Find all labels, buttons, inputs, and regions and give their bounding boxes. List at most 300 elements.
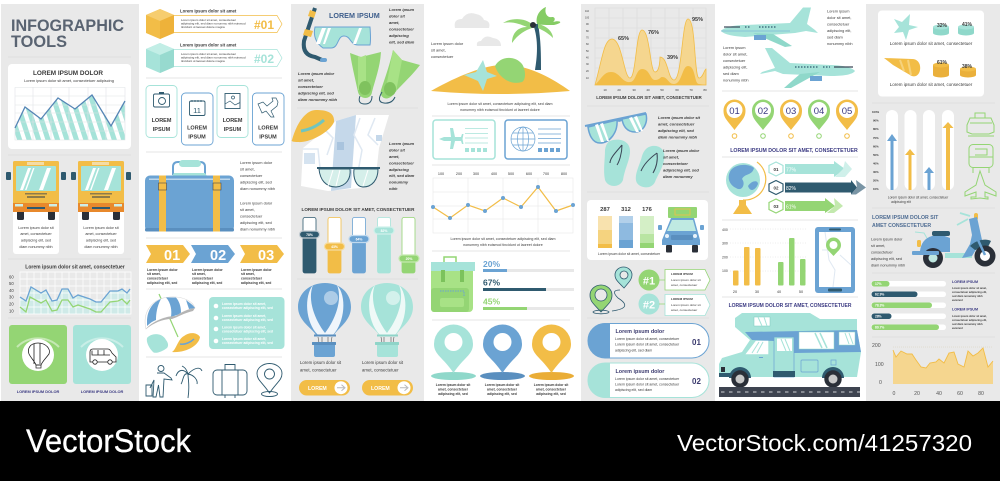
area chart with percent peaks: 95% [692,17,703,23]
arrow steps: sit amet, [192,272,206,276]
text block: map right: Lorem ipsum [389,141,415,146]
arrow steps: Lorem ipsum dolor [241,268,272,272]
text block: scooter: sit amet, [871,244,885,248]
panel: bus two: diam nonummy nibh [84,245,118,249]
text block: plane one: adipiscing elit, [827,28,851,33]
line chart with markers: 700 [543,172,549,176]
suitcase text [240,160,275,232]
pill 02: Lorem ipsum dolor sit amet, consectetuer [615,377,680,381]
text block: flip flops [663,148,700,179]
arrow bar chart: 30% [873,170,879,174]
arrow steps: consectetuer [147,276,169,280]
pill 01: Lorem ipsum dolor sit amet, consectetuer [615,342,680,346]
callouts #1 #2: Lorem ipsum dolor sit [671,278,701,282]
text block: progress legend: LOREM IPSUM [952,308,978,312]
text block: plane two: dolor sit amet, [723,52,747,56]
icon: route pins [590,267,632,314]
area chart with percent peaks: LOREM IPSUM DOLOR SIT AMET, CONSECTETUER [596,95,703,100]
text block: fins left: diam nonummy nibh [298,97,338,102]
area chart: 0 [893,391,896,397]
arrow 01: 77% [786,168,797,174]
arrow 03 [769,198,843,213]
panel: bus one: diam nonummy nibh [19,245,53,249]
arrow bar chart: 40% [873,162,879,166]
balloon captions: amet, consectetuer [362,368,399,372]
icon: flip flops [604,140,664,187]
text block: map right: adipiscing [389,167,409,172]
step tag 02: tincidunt ut laoreet dolore magna [181,59,225,63]
callouts #1 #2: amet, consectetuer [671,283,697,287]
panel: bus two [71,161,131,254]
icon: plane one [721,8,818,47]
arrow bar chart: 70% [873,136,879,140]
panel: balloon icon: LOREM IPSUM DOLOR [17,389,59,394]
suitcase text: diam nonummy nibh [240,226,275,232]
arrow bar chart: 80% [873,127,879,131]
vertical slider chart [300,207,419,273]
area chart: 20 [914,391,920,397]
text block: plane one: sed diam [827,34,843,40]
text block: plane two: adipiscing elit, [723,64,747,70]
line chart with markers: 200 [456,172,462,176]
card: plane: IPSUM [259,134,277,140]
panel: line chart: Lorem ipsum dolor sit amet, consectetuer adipiscing [24,78,114,83]
pill 02: adipiscing elit, sed diam [615,388,652,392]
pins 01 to 05 [724,100,858,138]
icon: teal pin: amet, consectetuer [438,388,469,392]
text block: plane two: sed diam [723,71,739,76]
arrow bar chart: adipiscing elit [891,200,911,204]
panel: bus one: Lorem ipsum dolor sit [18,226,54,230]
balloon captions: amet, consectetuer [300,368,337,372]
bar chart: 40 [777,290,781,294]
button one: LOREM [308,386,327,392]
card: calendar [182,93,213,145]
text block: progress legend: sed diam nonummy nibh [952,322,983,326]
text block: map right: amet, [389,154,399,159]
panel: star, shell, cylinders: 32% [937,23,948,29]
balloon captions: Lorem ipsum dolor sit [362,360,404,365]
text block: progress legend: euismod [952,326,963,330]
callouts #1 #2: LOREM IPSUM [671,272,693,276]
arrow steps [146,245,284,285]
icon: yellow pin: Lorem ipsum dolor sit [534,383,569,387]
text block: progress legend: sed diam nonummy nibh [952,294,983,298]
icon: blue pin: amet, consectetuer [487,388,518,392]
step tag 02: Lorem ipsum dolor sit amet [180,42,237,48]
panel: bus two: amet, consectetuer [85,232,117,236]
multi-line area chart: 60 [9,274,14,280]
line chart with markers: 400 [491,172,497,176]
bar chart: 50 [799,290,803,294]
card: camera [146,86,177,138]
arrow bar chart: 100% [872,110,880,114]
text block: sunglasses: diam nonummy nibh [658,134,698,140]
text block: plane one: Lorem ipsum [827,8,850,14]
horizontal progress pills: 62.9% [875,292,884,296]
text block: plane two: Lorem ipsum [723,45,746,50]
text block: snorkel right: adipiscing [389,33,409,38]
vertical slider chart: LOREM IPSUM DOLOR SIT AMET, CONSECTETUER [302,207,415,212]
text block: sunglasses: Lorem ipsum dolor sit [658,115,701,120]
title [11,17,124,51]
progress bars: 20% [483,259,500,269]
balloon captions: Lorem ipsum dolor sit [300,360,342,365]
heading: scooter: LOREM IPSUM DOLOR SIT [872,215,939,221]
horizontal progress pills: 28% [875,314,882,318]
icon: teal pin: Lorem ipsum dolor sit [436,383,471,387]
arrow bar chart: 60% [873,144,879,148]
text block: snorkel right: Lorem ipsum [389,7,415,12]
panel: star, shell, cylinders: 61% [937,60,948,66]
panel: balloon icon [9,325,67,394]
illustration: camper van [719,313,861,397]
icon: suitcase [145,160,234,232]
area chart [872,343,993,397]
arrow steps: adipiscing elit, sed [147,281,177,285]
text block: scooter: adipiscing elit, sed [871,257,902,261]
suitcase text: adipiscing elit, sed [240,220,272,225]
area chart with percent peaks: 90 [586,23,589,26]
step tag 01: Lorem ipsum dolor sit amet, consectetuer [181,18,236,22]
area chart with percent peaks: 76% [648,30,659,36]
arrow steps: sit amet, [147,272,161,276]
multi-line area chart: 10 [9,308,14,314]
icon: teal pin [431,324,476,396]
area chart: 60 [957,391,963,397]
text block: scooter [871,238,905,268]
arrow 02 [769,180,866,194]
arrow steps: adipiscing elit, sed [192,281,222,285]
green line icons: ship, bus, plane [965,113,996,199]
text block: island [431,41,464,59]
pill 02: Lorem ipsum dolor sit amet, consectetuer [615,382,680,386]
callouts #1 #2 [638,270,710,316]
bar chart: 400 [722,228,728,232]
button one [299,380,350,396]
pill 02: Lorem ipsum dolor [616,369,665,375]
pill 01 [588,323,709,358]
text block: island caption [447,102,553,112]
icon: sunglasses [585,113,647,143]
card: calendar: 11 [193,106,201,115]
area chart with percent peaks: 20 [586,70,589,73]
line chart with markers: 300 [473,172,479,176]
pins 01 to 05: 02 [758,106,768,117]
arrow bar chart: 20% [873,178,879,182]
arrow steps: sit amet, [241,272,255,276]
text block: scooter: Lorem ipsum dolor [871,238,903,242]
card: plane: LOREM [258,126,278,132]
area chart with percent peaks: 80 [586,30,589,33]
watermark bar: VectorStock.com/41257320 [677,430,972,456]
suitcase text: sit amet, [240,207,255,212]
icon: teal pin: adipiscing elit, sed [438,392,468,396]
area chart with percent peaks: 65% [618,36,629,42]
arrow bar chart [872,110,954,204]
text block: map right: elit, sed diam [389,173,415,178]
panel: stacked bars and car: Lorem ipsum dolor sit amet, consectetuer [598,252,661,256]
text block: map right: dolor sit [389,148,405,152]
button two: LOREM [371,386,390,392]
area chart with percent peaks: 50 [586,50,589,53]
area chart with percent peaks: 40 [586,56,589,60]
line icons: traveller, palm, suitcase, pin [146,364,282,398]
text block: plane one: dolor sit amet, [827,15,851,20]
area chart with percent peaks: 50 [660,88,664,92]
card: world ticket [505,120,567,159]
area chart with percent peaks: 70 [689,88,693,92]
area chart with percent peaks: 70 [586,36,589,40]
text block: fins left: Lorem ipsum dolor [298,71,335,76]
line chart with markers: 500 [508,172,514,176]
illustration: island with palm [431,7,570,94]
suitcase text: diam nonummy nibh [240,186,275,191]
card: camera: IPSUM [153,127,171,133]
area chart with percent peaks: 20 [617,88,621,92]
button two [362,380,413,396]
text block: map right [389,141,415,191]
panel: star, shell, cylinders [878,10,984,96]
area chart: 80 [978,391,984,397]
line chart with markers: 100 [438,172,444,176]
icon: yellow pin: amet, consectetuer [536,388,567,392]
card: flight ticket [433,120,495,159]
card: picture [217,86,248,138]
arrow 01 [769,161,852,177]
area chart: 200 [872,343,881,349]
bar chart: 100 [722,269,728,273]
text block: fins left [298,71,338,102]
pins 01 to 05: 03 [786,106,796,117]
area chart with percent peaks: 30 [632,88,636,92]
icon: phone with map pin [815,227,855,293]
suitcase text: Lorem ipsum dolor [240,200,273,206]
suitcase text: consectetuer [240,173,263,178]
icon: scooter [912,213,996,268]
callouts #1 #2: #1 [643,276,655,288]
text block: flip flops: consectetuer [663,161,688,166]
icon: fins [350,50,420,104]
area chart with percent peaks: 100 [585,16,590,20]
callouts #1 #2: Lorem ipsum dolor sit [671,303,701,307]
line chart with markers: nonummy nibh euismod tincidunt ut laoreet dolore [463,243,543,247]
vertical slider chart: 64% [356,238,362,242]
area chart: 40 [936,391,942,397]
text block: progress legend: LOREM IPSUM [952,280,978,284]
text block: plane two: consectetuer [723,58,746,63]
panel: star, shell, cylinders: 41% [962,22,973,28]
arrow 02: 02 [773,186,779,190]
pill 01: Lorem ipsum dolor [616,329,665,335]
area chart: 0 [879,380,882,386]
icon: map, hat, glasses [292,110,389,191]
panel: bus one: amet, consectetuer [20,232,52,236]
text block: plane one: nonummy nibh [827,41,853,46]
step tag 01 [146,8,282,39]
icon: plane two [760,48,855,88]
watermark bar [0,401,1000,481]
arrow 03: 61% [786,204,797,210]
area chart: 100 [875,362,884,368]
suitcase text: Lorem ipsum dolor [240,160,273,165]
clouds [455,13,501,46]
panel: star, shell, cylinders: Lorem ipsum dolor sit amet, consectetuer [890,41,973,46]
panel: bullet list: consectetuer adipiscing elit, sed [222,330,273,334]
card: camera: LOREM [152,118,172,124]
pins 01 to 05: 04 [814,106,824,117]
suitcase text: consectetuer [240,214,263,218]
text block: island: consectetuer [431,54,454,59]
arrow bar chart: 10% [873,187,879,191]
step tag 02: Lorem ipsum dolor sit amet, consectetuer [181,52,236,56]
icon: snorkel and mask [303,8,370,62]
text block: scooter: diam nonummy nibh [871,264,905,268]
text block: sunglasses [658,115,701,140]
text block: map right: consectetuer [389,160,414,166]
icon: blue pin: Lorem ipsum dolor sit [485,383,520,387]
area chart with percent peaks [585,8,707,100]
icon: yellow pin: adipiscing elit, sed [536,392,566,396]
multi-line area chart: Lorem ipsum dolor sit amet, consectetuer [25,264,125,270]
horizontal progress pills [871,281,946,330]
arrow 03: 03 [773,204,779,209]
callouts #1 #2: #2 [643,300,655,312]
card: calendar: LOREM [187,126,207,132]
progress bars: 45% [483,296,500,306]
vertical slider chart: 20% [406,257,412,261]
horizontal progress pills: 89.7% [875,326,884,330]
icon: beach umbrella, shell, hat [145,294,200,353]
horizontal progress pills: 78.3% [875,304,884,308]
icon: yellow pin [529,324,574,396]
text block: island: sit amet, [431,48,446,52]
multi-line area chart [9,264,131,314]
panel: bus one [6,161,66,254]
icon: backpack [431,257,475,312]
card: picture: LOREM [223,118,243,124]
step tag 02: #02 [254,52,274,66]
panel: bus two: adipiscing elit, sed [86,238,116,242]
bar chart: 300 [722,242,728,246]
panel: bullet list: consectetuer adipiscing elit, sed [222,341,273,345]
step tag 02: adipiscing elit, sed diam nonummy nibh euismod [181,56,246,60]
title: INFOGRAPHIC [11,17,124,35]
area chart with percent peaks: 30 [586,63,589,66]
arrow steps: Lorem ipsum dolor [192,268,223,272]
step tag 01: adipiscing elit, sed diam nonummy nibh euismod [181,22,246,26]
pill 01: adipiscing elit, sed diam [615,348,652,352]
card: calendar: IPSUM [188,134,206,140]
area chart with percent peaks: 39% [667,55,678,61]
text block: fins left: adipiscing elit, sed [298,90,334,96]
text block: snorkel right: consectetuer [389,26,414,32]
arrow steps: 02 [210,248,226,264]
text block: sunglasses: adipiscing elit, sed [658,128,694,133]
progress bars [483,259,574,310]
icon: blue pin [480,324,525,396]
area chart with percent peaks: 110 [585,10,590,13]
callouts #1 #2: LOREM IPSUM [671,297,693,301]
arrow bar chart: Lorem ipsum dolor sit amet, consectetuer [888,196,949,200]
panel: bullet list: consectetuer adipiscing elit, sed [222,318,273,322]
text block: map right: nonummy [389,180,409,184]
icon: blue pin: adipiscing elit, sed [487,392,517,396]
text block: plane one [827,8,853,46]
horizontal progress pills: 17% [875,282,882,286]
panel: stacked bars and car: 176 [642,207,653,213]
text block: island caption: Lorem ipsum dolor sit amet, consectetuer adipiscing elit, sed diam [447,102,553,106]
line chart with markers: 800 [561,172,567,176]
arrow bar chart: 90% [873,118,879,122]
text block: sunglasses: amet, consectetuer [658,122,695,126]
area chart with percent peaks: 40 [646,88,650,92]
panel: stacked bars and car [587,200,708,260]
arrow steps: consectetuer [241,276,263,280]
bar chart: 200 [722,256,728,260]
pill 02 [588,363,709,398]
arrow 02: 82% [786,186,797,192]
text block: progress legend: consectetuer adipiscing elit, [952,290,987,294]
panel: bullet list [209,297,284,349]
text block: scooter: consectetuer [871,250,893,254]
text block: map right: nibh [389,186,398,191]
vertical slider chart: 43% [331,245,338,249]
panel: bullet list: Lorem ipsum dolor sit amet, [222,326,266,330]
text block: flip flops: Lorem ipsum dolor [663,148,700,153]
panel: stacked bars and car: 312 [621,207,631,213]
text block: island caption: nonummy nibh euismod tincidunt ut laoreet dolore [460,108,540,112]
icon: blue balloon [298,283,351,357]
bar chart [722,228,807,294]
arrow steps: adipiscing elit, sed [241,281,271,285]
bar chart: 20 [733,290,737,294]
text block: flip flops: adipiscing elit, sed [663,168,699,172]
text block: progress legend: Lorem ipsum dolor sit amet, [952,286,987,290]
bar chart: 30 [755,290,759,294]
panel: van icon [73,325,131,394]
line chart with markers: 600 [526,172,532,176]
card: picture: IPSUM [224,127,242,133]
suitcase text: sit amet, [240,166,255,172]
text block: progress legend [952,280,987,330]
pill 01: 01 [692,338,701,347]
text block: progress legend: Lorem ipsum dolor sit amet, [952,314,987,318]
text block: snorkel right [389,7,415,44]
panel: bullet list: Lorem ipsum dolor sit amet, [222,314,266,318]
arrow steps: 03 [258,248,274,264]
pins 01 to 05: 01 [729,106,740,117]
panel: van icon: LOREM IPSUM DOLOR [81,389,123,394]
heading: scooter [872,215,939,229]
area chart with percent peaks: 10 [603,88,607,92]
heading: scooter: AMET CONSECTETUER [872,223,931,229]
heading: pins: LOREM IPSUM DOLOR SIT AMET, CONSECTETUER [730,148,858,154]
line chart with markers: Lorem ipsum dolor sit amet, consectetuer adipiscing elit, sed diam [450,237,556,241]
panel: stacked bars and car: 287 [600,207,610,213]
text block: snorkel right: dolor sit [389,14,405,18]
arrow 01: 01 [773,167,779,172]
panel: line chart [8,64,131,149]
watermark bar: VectorStock [26,423,192,459]
multi-line area chart: 40 [9,288,14,293]
icon: teal balloon [361,283,413,357]
pins 01 to 05: 05 [842,106,852,117]
arrow steps: consectetuer [192,276,214,280]
text block: plane two: nonummy nibh [723,78,749,82]
pill 02: 02 [692,377,701,386]
vertical slider chart: 78% [306,233,313,237]
